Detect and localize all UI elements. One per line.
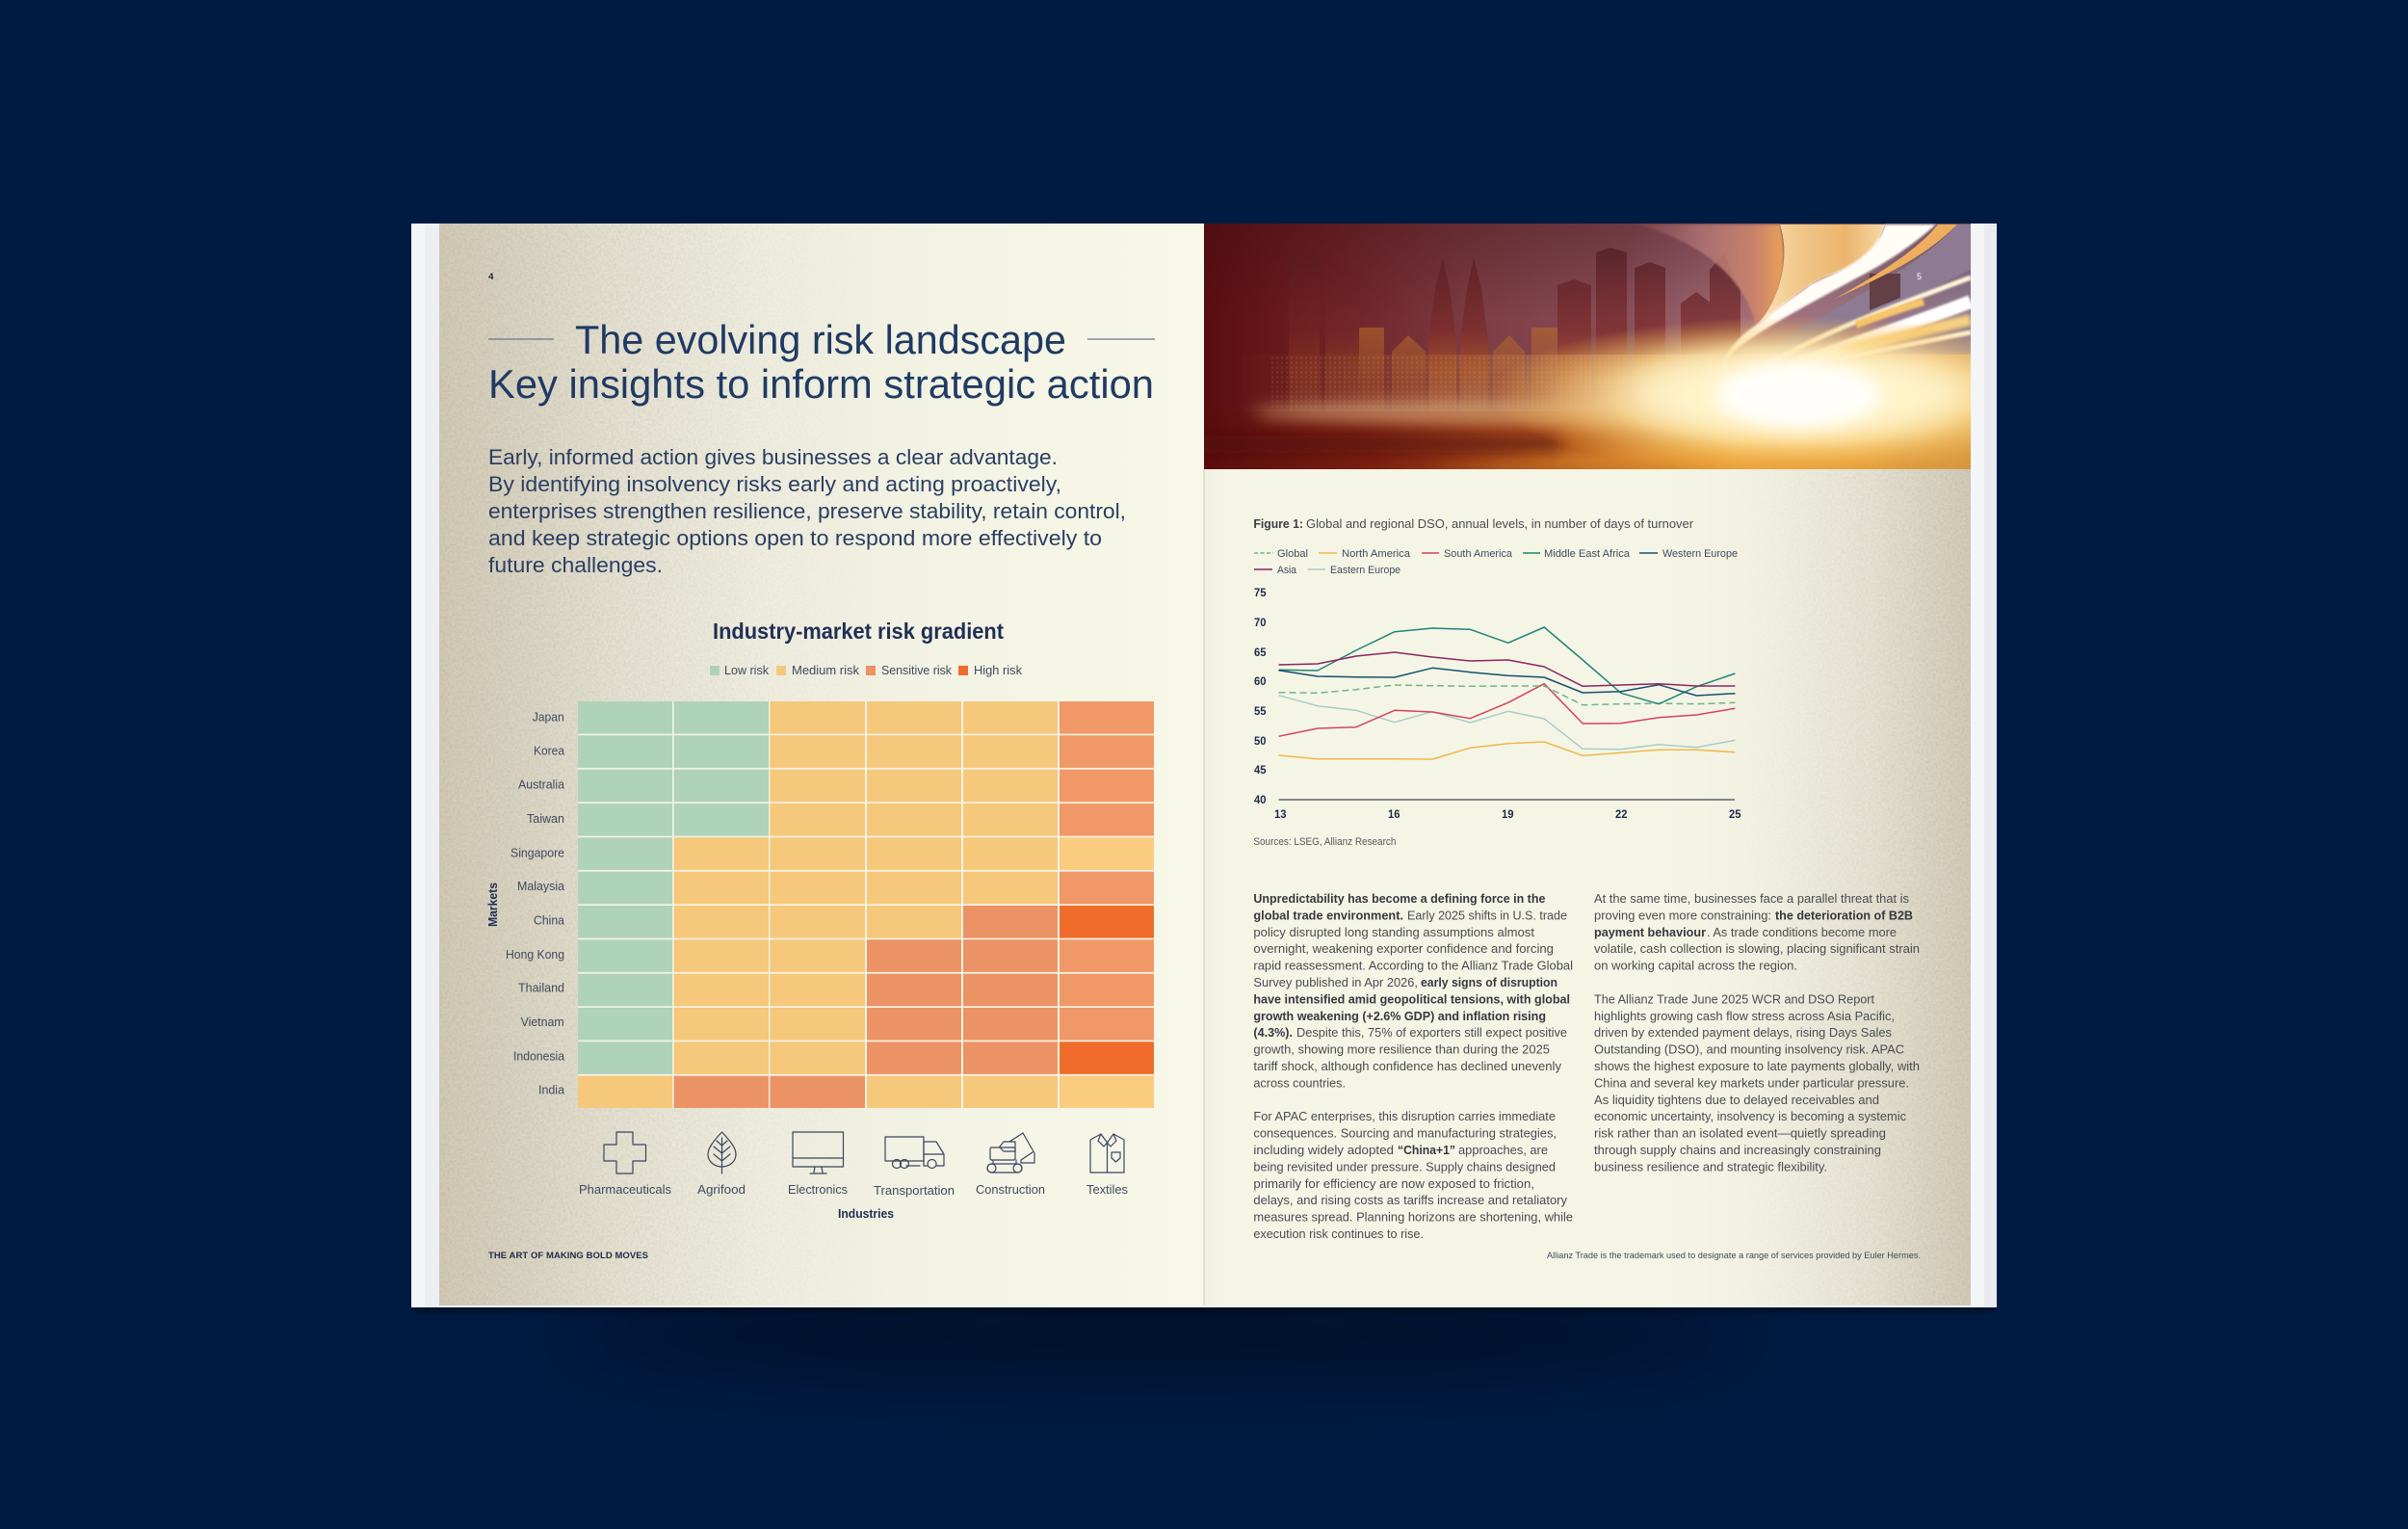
body text column 2: Outstanding (DSO), and mounting insolvency risk. APAC	[1594, 1042, 1904, 1057]
body text column 1: overnight, weakening exporter confidence and forcing	[1253, 941, 1554, 956]
intro paragraph: enterprises strengthen resilience, preserve stability, retain control,	[488, 499, 1126, 523]
body text column 2	[1594, 891, 1920, 1173]
series: Global	[1279, 685, 1735, 705]
market row labels: Korea	[534, 744, 565, 757]
light burst	[1505, 318, 1971, 466]
paper background right	[1204, 224, 1971, 1305]
market row labels	[506, 709, 565, 1097]
market row labels: Vietnam	[521, 1015, 564, 1029]
body text column 1: Unpredictability has become a defining force in the	[1253, 891, 1545, 906]
body text column 1: Early 2025 shifts in U.S. trade	[1407, 908, 1567, 922]
market row labels: India	[538, 1083, 565, 1097]
body text column 2: proving even more constraining:	[1594, 908, 1771, 922]
y axis labels: 75	[1254, 588, 1267, 599]
heatmap grid	[578, 701, 1154, 1108]
body text column 1: For APAC enterprises, this disruption carries immediate	[1253, 1109, 1556, 1123]
footnote: trademark: Allianz Trade is the trademark used to designate a range of services provided by Euler Hermes.	[1547, 1251, 1921, 1260]
body text column 2: . As trade conditions become more	[1707, 925, 1897, 939]
body text column 2: volatile, cash collection is slowing, placing significant strain	[1594, 941, 1920, 956]
icon: transportation truck	[885, 1137, 944, 1168]
rose band	[1637, 224, 1784, 326]
market row labels: Malaysia	[517, 879, 565, 893]
footer: publication title: THE ART OF MAKING BOLD MOVES	[488, 1251, 648, 1261]
line chart legend: North America	[1342, 548, 1411, 560]
y axis labels: 45	[1254, 765, 1267, 777]
body text column 2: As liquidity tightens due to delayed receivables and	[1594, 1093, 1879, 1107]
figure title: Figure 1:	[1253, 516, 1303, 531]
body text column 2: driven by extended payment delays, rising Days Sales	[1594, 1025, 1892, 1040]
city base haze	[1384, 355, 1971, 411]
y axis labels: 70	[1254, 618, 1266, 629]
mauve sky at right	[1786, 224, 1971, 338]
body text column 2: At the same time, businesses face a parallel threat that is	[1594, 891, 1909, 906]
market row labels: Thailand	[518, 981, 564, 995]
heatmap legend: Medium risk	[792, 664, 860, 677]
line chart legend: Middle East Africa	[1544, 548, 1631, 560]
title: Key insights to inform strategic action	[488, 361, 1154, 407]
axis title: markets: Markets	[486, 883, 500, 927]
low buildings	[1359, 328, 1557, 403]
industry labels: Textiles	[1086, 1182, 1128, 1197]
figure title: Global and regional DSO, annual levels, in number of days of turnover	[1306, 516, 1694, 531]
body text column 1: being revisited under pressure. Supply chains designed	[1253, 1159, 1556, 1173]
market row labels: Hong Kong	[506, 947, 564, 962]
line chart legend: Eastern Europe	[1330, 565, 1400, 576]
icon: construction excavator	[987, 1133, 1034, 1173]
line chart legend	[1254, 548, 1738, 576]
y axis labels: 65	[1254, 647, 1267, 659]
line chart legend: South America	[1444, 548, 1513, 560]
body text column 1: global trade environment.	[1253, 908, 1403, 922]
market row labels: Indonesia	[513, 1048, 565, 1063]
chart sources: Sources: LSEG, Allianz Research	[1253, 836, 1396, 848]
intro paragraph	[488, 445, 1126, 577]
body text column 1: including widely adopted	[1253, 1143, 1394, 1157]
market row labels: Japan	[533, 709, 564, 725]
y axis labels: 55	[1254, 706, 1267, 718]
body text column 1: growth weakening (+2.6% GDP) and inflation rising	[1253, 1009, 1546, 1023]
heatmap legend: Low risk	[724, 664, 770, 677]
page edge strips	[411, 224, 1997, 1307]
industry labels: Electronics	[788, 1182, 848, 1197]
industry labels: Agrifood	[697, 1182, 746, 1197]
industry labels: Construction	[976, 1182, 1045, 1197]
line chart: DSO by region	[1254, 588, 1741, 821]
body text column 1: Despite this, 75% of exporters still expect positive	[1296, 1025, 1567, 1040]
line chart legend: Western Europe	[1662, 548, 1738, 560]
body text column 1: early signs of disruption	[1421, 975, 1557, 989]
x axis: 13	[1274, 809, 1287, 821]
y axis labels: 40	[1254, 795, 1266, 806]
body text column 1: primarily for efficiency are now exposed to friction,	[1253, 1176, 1534, 1191]
market row labels: Singapore	[510, 845, 564, 859]
body text column 1: across countries.	[1253, 1075, 1346, 1090]
body text column 1: rapid reassessment. According to the Allianz Trade Global	[1253, 959, 1573, 973]
body text column 1: “China+1”	[1398, 1143, 1455, 1157]
intro paragraph: future challenges.	[488, 553, 663, 577]
line chart legend: Asia	[1277, 565, 1297, 576]
paper grain left	[439, 224, 802, 1305]
body text column 2: payment behaviour	[1594, 925, 1706, 939]
panel: left page	[439, 224, 1204, 1305]
x axis: 19	[1502, 809, 1514, 821]
body text column 2: economic uncertainty, insolvency is becoming a systemic	[1594, 1109, 1906, 1123]
y axis labels: 50	[1254, 736, 1266, 748]
x axis: 25	[1729, 809, 1741, 821]
city skyline	[1289, 248, 1741, 414]
body text column 2: on working capital across the region.	[1594, 959, 1797, 973]
body text column 2: business resilience and strategic flexibility.	[1594, 1159, 1827, 1173]
industry labels: Transportation	[874, 1183, 955, 1198]
body text column 1	[1253, 891, 1573, 1241]
heatmap legend: Sensitive risk	[881, 664, 953, 677]
line chart legend: Global	[1277, 548, 1308, 560]
heatmap legend: High risk	[974, 664, 1023, 677]
book shadow	[414, 1296, 1994, 1373]
body text column 1: Survey published in Apr 2026,	[1253, 975, 1418, 989]
industry labels	[579, 1182, 1128, 1198]
series: North America	[1279, 742, 1735, 759]
orange thin band	[1835, 224, 1957, 299]
white band	[1724, 224, 1936, 361]
body text column 2: risk rather than an isolated event—quietly spreading	[1594, 1126, 1886, 1141]
body text column 2: shows the highest exposure to late payments globally, with	[1594, 1059, 1920, 1073]
series: Asia	[1279, 652, 1735, 686]
body text column 1: measures spread. Planning horizons are shortening, while	[1253, 1210, 1573, 1225]
page number 4: 4	[488, 272, 493, 281]
body text column 2: highlights growing cash flow stress across Asia Pacific,	[1594, 1009, 1895, 1023]
light streaks	[1724, 361, 1739, 376]
body text column 2: China and several key markets under particular pressure.	[1594, 1075, 1909, 1090]
x axis: 22	[1615, 809, 1628, 821]
series: Middle East Africa	[1279, 627, 1735, 704]
icon: pharmaceuticals cross	[604, 1132, 645, 1173]
book spread infographic	[411, 224, 1997, 1392]
heatmap legend	[710, 664, 1023, 677]
paper background left	[439, 224, 1204, 1305]
paper grain right	[1794, 469, 1971, 1305]
chart heading: Industry-market risk gradient	[713, 619, 1004, 644]
x axis: 16	[1388, 809, 1400, 821]
intro paragraph: Early, informed action gives businesses a clear advantage.	[488, 445, 1058, 469]
series: Western Europe	[1279, 668, 1735, 696]
body text column 2: through supply chains and increasingly constraining	[1594, 1143, 1881, 1157]
body text column 2: the deterioration of B2B	[1775, 908, 1913, 922]
body text column 2: The Allianz Trade June 2025 WCR and DSO Report	[1594, 991, 1874, 1006]
body text column 1: growth, showing more resilience than during the 2025	[1253, 1042, 1550, 1057]
axis title: industries: Industries	[838, 1207, 894, 1221]
market row labels: Taiwan	[527, 811, 564, 826]
icon: textiles shirt	[1090, 1134, 1124, 1173]
body text column 1: policy disrupted long standing assumptions almost	[1253, 925, 1534, 939]
intro paragraph: By identifying insolvency risks early and acting proactively,	[488, 472, 1061, 496]
body text column 1: consequences. Sourcing and manufacturing strategies,	[1253, 1126, 1557, 1141]
icon: agrifood leaf	[708, 1132, 736, 1173]
tan band	[1756, 224, 1885, 326]
icon: electronics monitor	[793, 1132, 844, 1173]
body text column 1: tariff shock, although confidence has declined unevenly	[1253, 1059, 1561, 1073]
body text column 1: have intensified amid geopolitical tensions, with global	[1253, 991, 1570, 1006]
market row labels: Australia	[518, 778, 565, 792]
x axis	[1274, 800, 1741, 821]
market row labels: China	[534, 913, 565, 927]
body text column 1: (4.3%).	[1253, 1025, 1293, 1040]
y axis labels: 60	[1254, 676, 1266, 688]
body text column 1: approaches, are	[1458, 1143, 1548, 1157]
title: The evolving risk landscape	[575, 317, 1066, 362]
body text column 1: execution risk continues to rise.	[1253, 1226, 1424, 1241]
series: South America	[1279, 684, 1735, 736]
industry labels: Pharmaceuticals	[579, 1182, 671, 1197]
page number 5: 5	[1917, 272, 1922, 281]
panel: right page	[1204, 224, 1971, 1305]
y axis labels	[1254, 588, 1267, 806]
series: Eastern Europe	[1279, 696, 1735, 750]
hero image: city with light trails	[1204, 224, 1971, 469]
intro paragraph: and keep strategic options open to respond more effectively to	[488, 526, 1102, 550]
body text column 1: delays, and rising costs as tariffs increase and retaliatory	[1253, 1193, 1567, 1207]
title	[488, 317, 1155, 407]
